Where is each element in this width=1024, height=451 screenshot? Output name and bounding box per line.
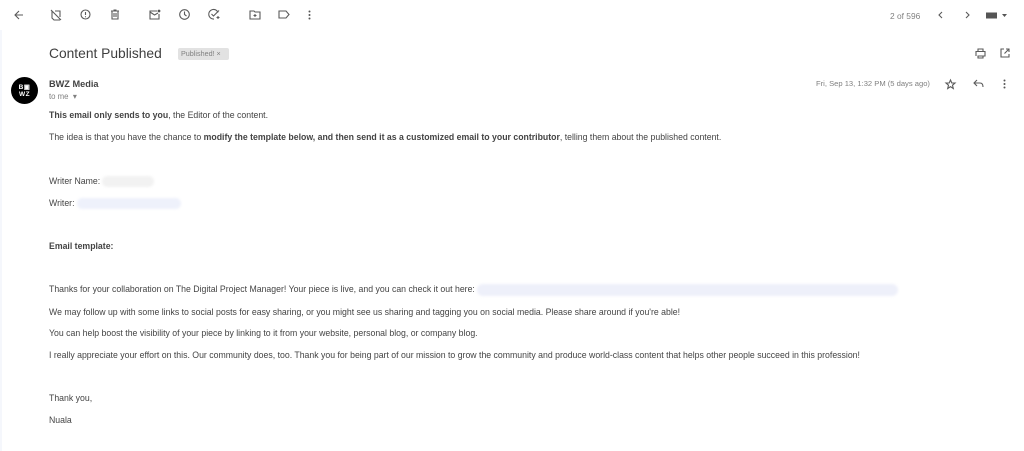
sender header <box>11 77 1006 104</box>
redacted writer name <box>102 176 154 187</box>
redacted article link <box>477 284 898 296</box>
icon: star <box>944 78 956 90</box>
visibility paragraph: You can help boost the visibility of your piece by linking to it from your website, personal blog, or company blog. <box>49 328 478 338</box>
icon: archive off <box>50 10 62 20</box>
icon: mark unread <box>149 10 160 20</box>
recipient line: to me ▾ <box>49 92 77 101</box>
social paragraph: We may follow up with some links to social posts for easy sharing, or you might see us sharing and tagging you on social media. Please share around if you're able! <box>49 307 680 317</box>
icon: more menu <box>308 10 310 20</box>
explanation sentence: The idea is that you have the chance to modify the template below, and then send it as a customized email to your contributor, telling them about the published content. <box>49 132 721 142</box>
icon: input tools keyboard <box>986 12 1007 18</box>
thanks paragraph: Thanks for your collaboration on The Digital Project Manager! Your piece is live, and you can check it out here: <box>49 284 475 294</box>
writer field: Writer: <box>49 198 75 208</box>
avatar: BWZ logo: B▣ <box>19 84 30 91</box>
print and open icons <box>975 48 1010 58</box>
icon: print <box>975 48 986 58</box>
sign-off: Thank you, <box>49 393 92 403</box>
icon: snooze clock <box>179 9 190 20</box>
icon: previous <box>938 12 942 18</box>
sender name: BWZ Media <box>49 79 99 89</box>
email body <box>49 110 898 425</box>
icon: next <box>966 12 970 18</box>
template heading: Email template: <box>49 241 113 251</box>
label chip <box>178 48 229 60</box>
pager count: 2 of 596 <box>890 11 920 21</box>
left edge tint <box>0 30 2 451</box>
icon: label <box>278 10 290 18</box>
toolbar <box>14 8 1007 21</box>
intro sentence: This email only sends to you, the Editor of the content. <box>49 110 268 120</box>
icon: reply <box>973 80 984 87</box>
icon: open in new window <box>1000 48 1010 58</box>
icon: report spam <box>80 10 90 20</box>
icon: add to tasks <box>208 8 220 20</box>
appreciation paragraph: I really appreciate your effort on this. Our community does, too. Thank you for being part of our mission to grow the community and produce world-class content that helps other people succeed in this profession! <box>49 350 860 360</box>
subject heading <box>49 46 229 61</box>
avatar: BWZ logo <box>11 77 38 104</box>
signature: Nuala <box>49 415 72 425</box>
subject title: Content Published <box>49 46 162 61</box>
date: Fri, Sep 13, 1:32 PM (5 days ago) <box>816 79 930 88</box>
avatar: BWZ logo: WZ <box>19 91 30 98</box>
icon: delete <box>111 10 119 20</box>
icon: back arrow <box>14 10 23 20</box>
label chip: Published! × <box>181 49 221 58</box>
icon: more vertical <box>1004 80 1006 88</box>
writer name field: Writer Name: <box>49 176 100 186</box>
redacted writer link <box>77 198 181 209</box>
icon: move to folder <box>249 10 261 20</box>
